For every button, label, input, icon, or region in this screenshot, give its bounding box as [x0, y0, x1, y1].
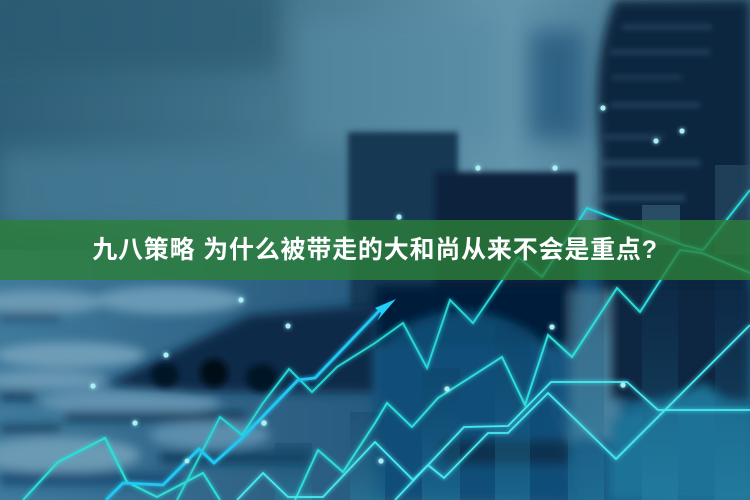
blurred coin stacks — [348, 0, 750, 330]
dark pen shape — [105, 305, 375, 392]
glowing network dots — [90, 105, 685, 464]
chart lines — [23, 190, 750, 500]
translucent chart bars — [275, 280, 750, 500]
blurred coins on the table — [0, 286, 310, 486]
blurred background tones — [0, 0, 585, 230]
lower right dark and blue tones — [375, 285, 750, 500]
chart arrow head — [375, 299, 396, 321]
title banner — [0, 220, 750, 280]
title: 九八策略 为什么被带走的大和尚从来不会是重点? — [92, 236, 658, 264]
